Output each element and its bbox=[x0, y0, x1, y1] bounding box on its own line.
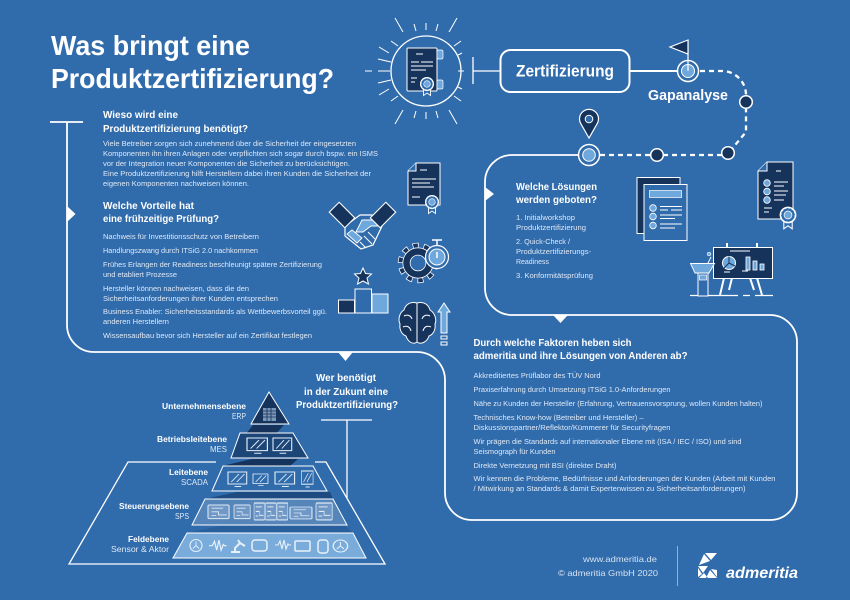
heading: Wer benötigt in der Zukunft: in der Zukunt eine bbox=[304, 386, 388, 398]
level: Steuerungsebene: SPS bbox=[175, 512, 189, 521]
footer contact bbox=[558, 546, 678, 586]
panel: Wieso wird eine Produktzertifizierung benötigt bbox=[103, 109, 378, 188]
panel: Wieso wird eine Produktzertifizierung benötigt: eigenen Komponenten nachweisen können. bbox=[103, 179, 249, 188]
level: Leitebene: Leitebene bbox=[169, 467, 208, 477]
panel: Durch welche Faktoren bbox=[474, 337, 776, 493]
panel: Welche Lösungen werden geboten: Readiness bbox=[516, 257, 549, 266]
panel: Wieso wird eine Produktzertifizierung benötigt: Eine Produktzertifizierung hilft Herstellern dabei ihren Kunden die Sicherheit der bbox=[103, 169, 371, 178]
heading: Wer benötigt in der Zukunft bbox=[296, 372, 398, 498]
panel: Welche Lösungen werden geboten: 3. Konformitätsprüfung bbox=[516, 271, 593, 280]
pyramid bbox=[69, 392, 385, 564]
heading: Wer benötigt in der Zukunft: Produktzertifizierung? bbox=[296, 399, 398, 411]
panel: Durch welche Faktoren: Wir kennen die Probleme, Bedürfnisse und Anforderungen der Kunden (Arbeit mit Kunden bbox=[474, 474, 776, 483]
level: Betriebsleitebene bbox=[157, 433, 308, 458]
panel: Welche Vorteile hat eine frühzeitige Prüfung bbox=[103, 200, 327, 340]
title bbox=[51, 30, 334, 94]
panel: Welche Lösungen werden geboten: werden geboten? bbox=[515, 194, 597, 206]
footer contact: © admeritia GmbH 2020 bbox=[558, 568, 658, 578]
milestone: location pin bbox=[578, 109, 600, 166]
icon: certificate with rays bbox=[365, 18, 464, 124]
panel: Welche Vorteile hat eine frühzeitige Prüfung: Welche Vorteile hat bbox=[103, 200, 194, 212]
icon: brain with arrow bbox=[399, 303, 450, 345]
panel: Welche Vorteile hat eine frühzeitige Prüfung: Sicherheitsanforderungen ihrer Kunden entsprechen bbox=[103, 294, 278, 303]
level: Feldebene: Feldebene bbox=[128, 534, 169, 544]
level: Feldebene: Sensor & Aktor bbox=[111, 545, 169, 554]
panel: Welche Vorteile hat eine frühzeitige Prüfung: Wissensaufbau bevor sich Hersteller auf ein Zertifikat festlegen bbox=[103, 331, 312, 340]
icon: checklist bbox=[637, 178, 687, 240]
level: Unternehmensebene: ERP bbox=[232, 412, 246, 421]
connector and box: Zertifizierung: Zertifizierung bbox=[516, 62, 614, 80]
panel: Durch welche Faktoren: admeritia und ihre Lösungen von Anderen ab? bbox=[474, 350, 688, 362]
title: Produktzertifizierung? bbox=[51, 63, 334, 94]
timeline path: left and lower route bbox=[50, 122, 797, 520]
panel: Durch welche Faktoren: Akkreditiertes Prüflabor des TÜV Nord bbox=[474, 371, 600, 380]
panel: Wieso wird eine Produktzertifizierung benötigt: Komponenten ihn ihren Anlagen oder verpflichten sich sogar durch bspw. ein ISMS bbox=[103, 149, 378, 158]
panel: Welche Lösungen werden geboten: 1. Initialworkshop bbox=[516, 213, 575, 222]
panel: Welche Vorteile hat eine frühzeitige Prüfung: Nachweis für Investitionsschutz von Betreibern bbox=[103, 232, 259, 241]
icon: certificate document bbox=[408, 163, 440, 214]
panel: Welche Lösungen werden geboten bbox=[515, 181, 597, 280]
icon: podium with star bbox=[338, 268, 388, 313]
panel: Wieso wird eine Produktzertifizierung benötigt: Produktzertifizierung benötigt? bbox=[103, 123, 248, 135]
panel: Durch welche Faktoren: Diskussionspartner/Reflektor/Kümmerer für Securityfragen bbox=[474, 423, 670, 432]
level: Leitebene: SCADA bbox=[181, 478, 209, 487]
panel: Welche Lösungen werden geboten: Produktzertifizierungs- bbox=[516, 247, 591, 256]
connector and box: Zertifizierung bbox=[473, 50, 677, 92]
panel: Durch welche Faktoren: Wir prägen die Standards auf internationaler Ebene mit (ISA / IEC / ISO) und sind bbox=[474, 437, 742, 446]
level: Betriebsleitebene: MES bbox=[210, 445, 227, 454]
panel: Welche Lösungen werden geboten: Welche Lösungen bbox=[516, 181, 597, 193]
panel: Welche Lösungen werden geboten: 2. Quick-Check / bbox=[516, 237, 571, 246]
footer contact: www.admeritia.de bbox=[582, 554, 657, 564]
icon: handshake bbox=[329, 202, 396, 249]
level: Leitebene bbox=[169, 466, 327, 491]
panel: Durch welche Faktoren: Direkte Vernetzung mit BSI (direkter Draht) bbox=[474, 461, 617, 470]
title: Was bringt eine bbox=[51, 30, 250, 61]
panel: Welche Lösungen werden geboten: Produktzertifizierung bbox=[516, 223, 586, 232]
panel: Durch welche Faktoren: Durch welche Faktoren heben sich bbox=[474, 337, 632, 349]
milestone: Gapanalyse flag bbox=[648, 40, 728, 104]
level: Steuerungsebene bbox=[119, 499, 347, 525]
logo: admeritia bbox=[698, 553, 798, 582]
icon: presentation board and lectern bbox=[690, 243, 773, 296]
panel: Welche Vorteile hat eine frühzeitige Prüfung: Business Enabler: Sicherheitsstandards als Wettbewerbsvorteil ggü. bbox=[103, 307, 327, 316]
panel: Durch welche Faktoren: / Mitwirkung an Standards & damit Expertenwissen zu Sicherheitsanforderungen) bbox=[474, 484, 746, 493]
icon: certified checklist bbox=[758, 162, 796, 229]
level: Feldebene bbox=[111, 533, 366, 558]
panel: Durch welche Faktoren: Seismograph für Kunden bbox=[474, 447, 556, 456]
panel: Wieso wird eine Produktzertifizierung benötigt: vor der Integration neuer Komponenten die Sicherheit zu berücksichtigen. bbox=[103, 159, 350, 168]
milestone: Gapanalyse flag: Gapanalyse bbox=[648, 88, 728, 104]
panel: Welche Vorteile hat eine frühzeitige Prüfung: und etabliert Prozesse bbox=[103, 270, 177, 279]
logo: admeritia: admeritia bbox=[726, 565, 798, 582]
panel: Wieso wird eine Produktzertifizierung benötigt: Viele Betreiber sorgen sich zunehmend über die Sicherheit der eingesetzten bbox=[103, 139, 356, 148]
panel: Welche Vorteile hat eine frühzeitige Prüfung: Frühes Erlangen der Readiness beschleunigt spätere Zertifizierung bbox=[103, 260, 322, 269]
level: Steuerungsebene: Steuerungsebene bbox=[119, 501, 189, 511]
level: Unternehmensebene: Unternehmensebene bbox=[162, 401, 246, 411]
panel: Wieso wird eine Produktzertifizierung benötigt: Wieso wird eine bbox=[103, 109, 178, 121]
panel: Welche Vorteile hat eine frühzeitige Prüfung: eine frühzeitige Prüfung? bbox=[103, 213, 219, 225]
level: Unternehmensebene bbox=[162, 392, 289, 424]
panel: Welche Vorteile hat eine frühzeitige Prüfung: Handlungszwang durch ITSiG 2.0 nachkommen bbox=[103, 246, 258, 255]
panel: Durch welche Faktoren: Nähe zu Kunden der Hersteller (Erfahrung, Vertrauensvorsprung, wollen Kunden halten) bbox=[474, 399, 763, 408]
panel: Durch welche Faktoren: Technisches Know-how (Betreiber und Hersteller) – bbox=[474, 413, 644, 422]
level: Betriebsleitebene: Betriebsleitebene bbox=[157, 434, 227, 444]
dotted route bbox=[600, 71, 752, 161]
icon: gear and stopwatch bbox=[400, 240, 448, 280]
panel: Welche Vorteile hat eine frühzeitige Prüfung: Hersteller können nachweisen, dass die den bbox=[103, 284, 249, 293]
heading: Wer benötigt in der Zukunft: Wer benötigt bbox=[316, 372, 376, 384]
panel: Welche Vorteile hat eine frühzeitige Prüfung: anderen Herstellern bbox=[103, 317, 169, 326]
panel: Durch welche Faktoren: Praxiserfahrung durch Umsetzung ITSiG 1.0-Anforderungen bbox=[474, 385, 670, 394]
